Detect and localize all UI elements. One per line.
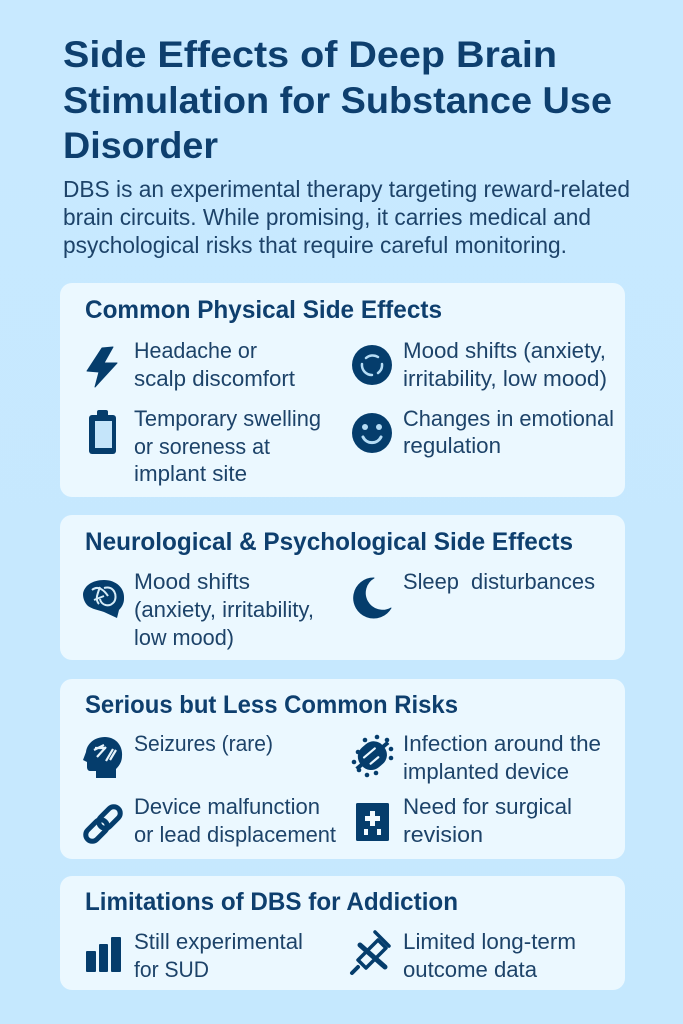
- text: experimental: [134, 929, 303, 982]
- text: infection: implanted device: [403, 759, 569, 784]
- text: limited data: outcome data: [403, 957, 537, 982]
- text: mood shifts: low mood): [134, 625, 234, 650]
- intro text: [63, 176, 630, 258]
- icon: battery: [89, 410, 116, 454]
- text: mood shifts: (anxiety, irritability,: [134, 597, 314, 622]
- text: headache: Headache or: [134, 338, 257, 363]
- text: emotional regulation: regulation: [403, 433, 501, 458]
- icon: hospital square: [356, 803, 389, 841]
- heading: neurological: Neurological & Psychological Side Effects: [85, 528, 573, 556]
- text: device malfunction: [134, 794, 337, 847]
- title: [63, 33, 612, 166]
- intro text: psychological risks that require careful monitoring.: [63, 232, 567, 258]
- text: experimental: for SUD: [134, 957, 209, 982]
- text: seizures: Seizures (rare): [134, 731, 273, 756]
- text: sleep: Sleep disturbances: [403, 569, 595, 594]
- text: headache: scalp discomfort: [134, 366, 296, 391]
- icon: bar chart: [86, 937, 121, 972]
- text: swelling: [134, 406, 321, 486]
- text: swelling: Temporary swelling: [134, 406, 321, 431]
- panel: serious but less common risks: [60, 679, 625, 859]
- text: mood shifts: Mood shifts: [134, 569, 250, 594]
- icon: syringe: [352, 932, 389, 973]
- icon: brain bubble: [83, 580, 124, 618]
- text: emotional regulation: Changes in emotional: [403, 406, 614, 431]
- title: Disorder: [63, 124, 218, 166]
- text: surgical revision: Need for surgical: [403, 794, 572, 819]
- text: mood shifts: irritability, low mood): [403, 366, 607, 391]
- text: swelling: implant site: [134, 461, 247, 486]
- icon: refresh circle: [352, 345, 392, 385]
- text: surgical revision: revision: [403, 822, 483, 847]
- icon: head with brain: [83, 737, 122, 778]
- text: swelling: or soreness at: [134, 434, 271, 459]
- icon: link: [83, 804, 123, 844]
- intro text: brain circuits. While promising, it carries medical and: [63, 204, 591, 230]
- heading: common physical: Common Physical Side Effects: [85, 296, 442, 324]
- text: mood shifts: Mood shifts (anxiety,: [403, 338, 606, 363]
- text: mood shifts: [134, 569, 314, 650]
- text: experimental: Still experimental: [134, 929, 303, 954]
- text: infection: Infection around the: [403, 731, 601, 756]
- heading: limitations: Limitations of DBS for Addiction: [85, 888, 458, 916]
- icon: lightning bolt: [87, 347, 117, 387]
- title: Side Effects of Deep Brain: [63, 33, 557, 75]
- text: surgical revision: [403, 794, 572, 847]
- intro text: DBS is an experimental therapy targeting reward-related: [63, 176, 630, 202]
- panel: neurological and psychological side effects: [60, 515, 625, 660]
- panel: limitations of DBS for addiction: [60, 876, 625, 990]
- icon: crescent moon: [354, 578, 391, 618]
- icon: smiley: [352, 413, 392, 453]
- icon: bacteria: [348, 733, 396, 779]
- text: headache: [134, 338, 296, 391]
- text: infection: [403, 731, 601, 784]
- text: limited data: Limited long-term: [403, 929, 576, 954]
- title: Stimulation for Substance Use: [63, 79, 612, 121]
- text: limited data: [403, 929, 576, 982]
- text: device malfunction: or lead displacement: [134, 822, 337, 847]
- text: emotional regulation: [403, 406, 614, 458]
- text: device malfunction: Device malfunction: [134, 794, 320, 819]
- panel: common physical side effects: [60, 283, 625, 497]
- heading: serious risks: Serious but Less Common Risks: [85, 691, 458, 719]
- text: mood shifts: [403, 338, 607, 391]
